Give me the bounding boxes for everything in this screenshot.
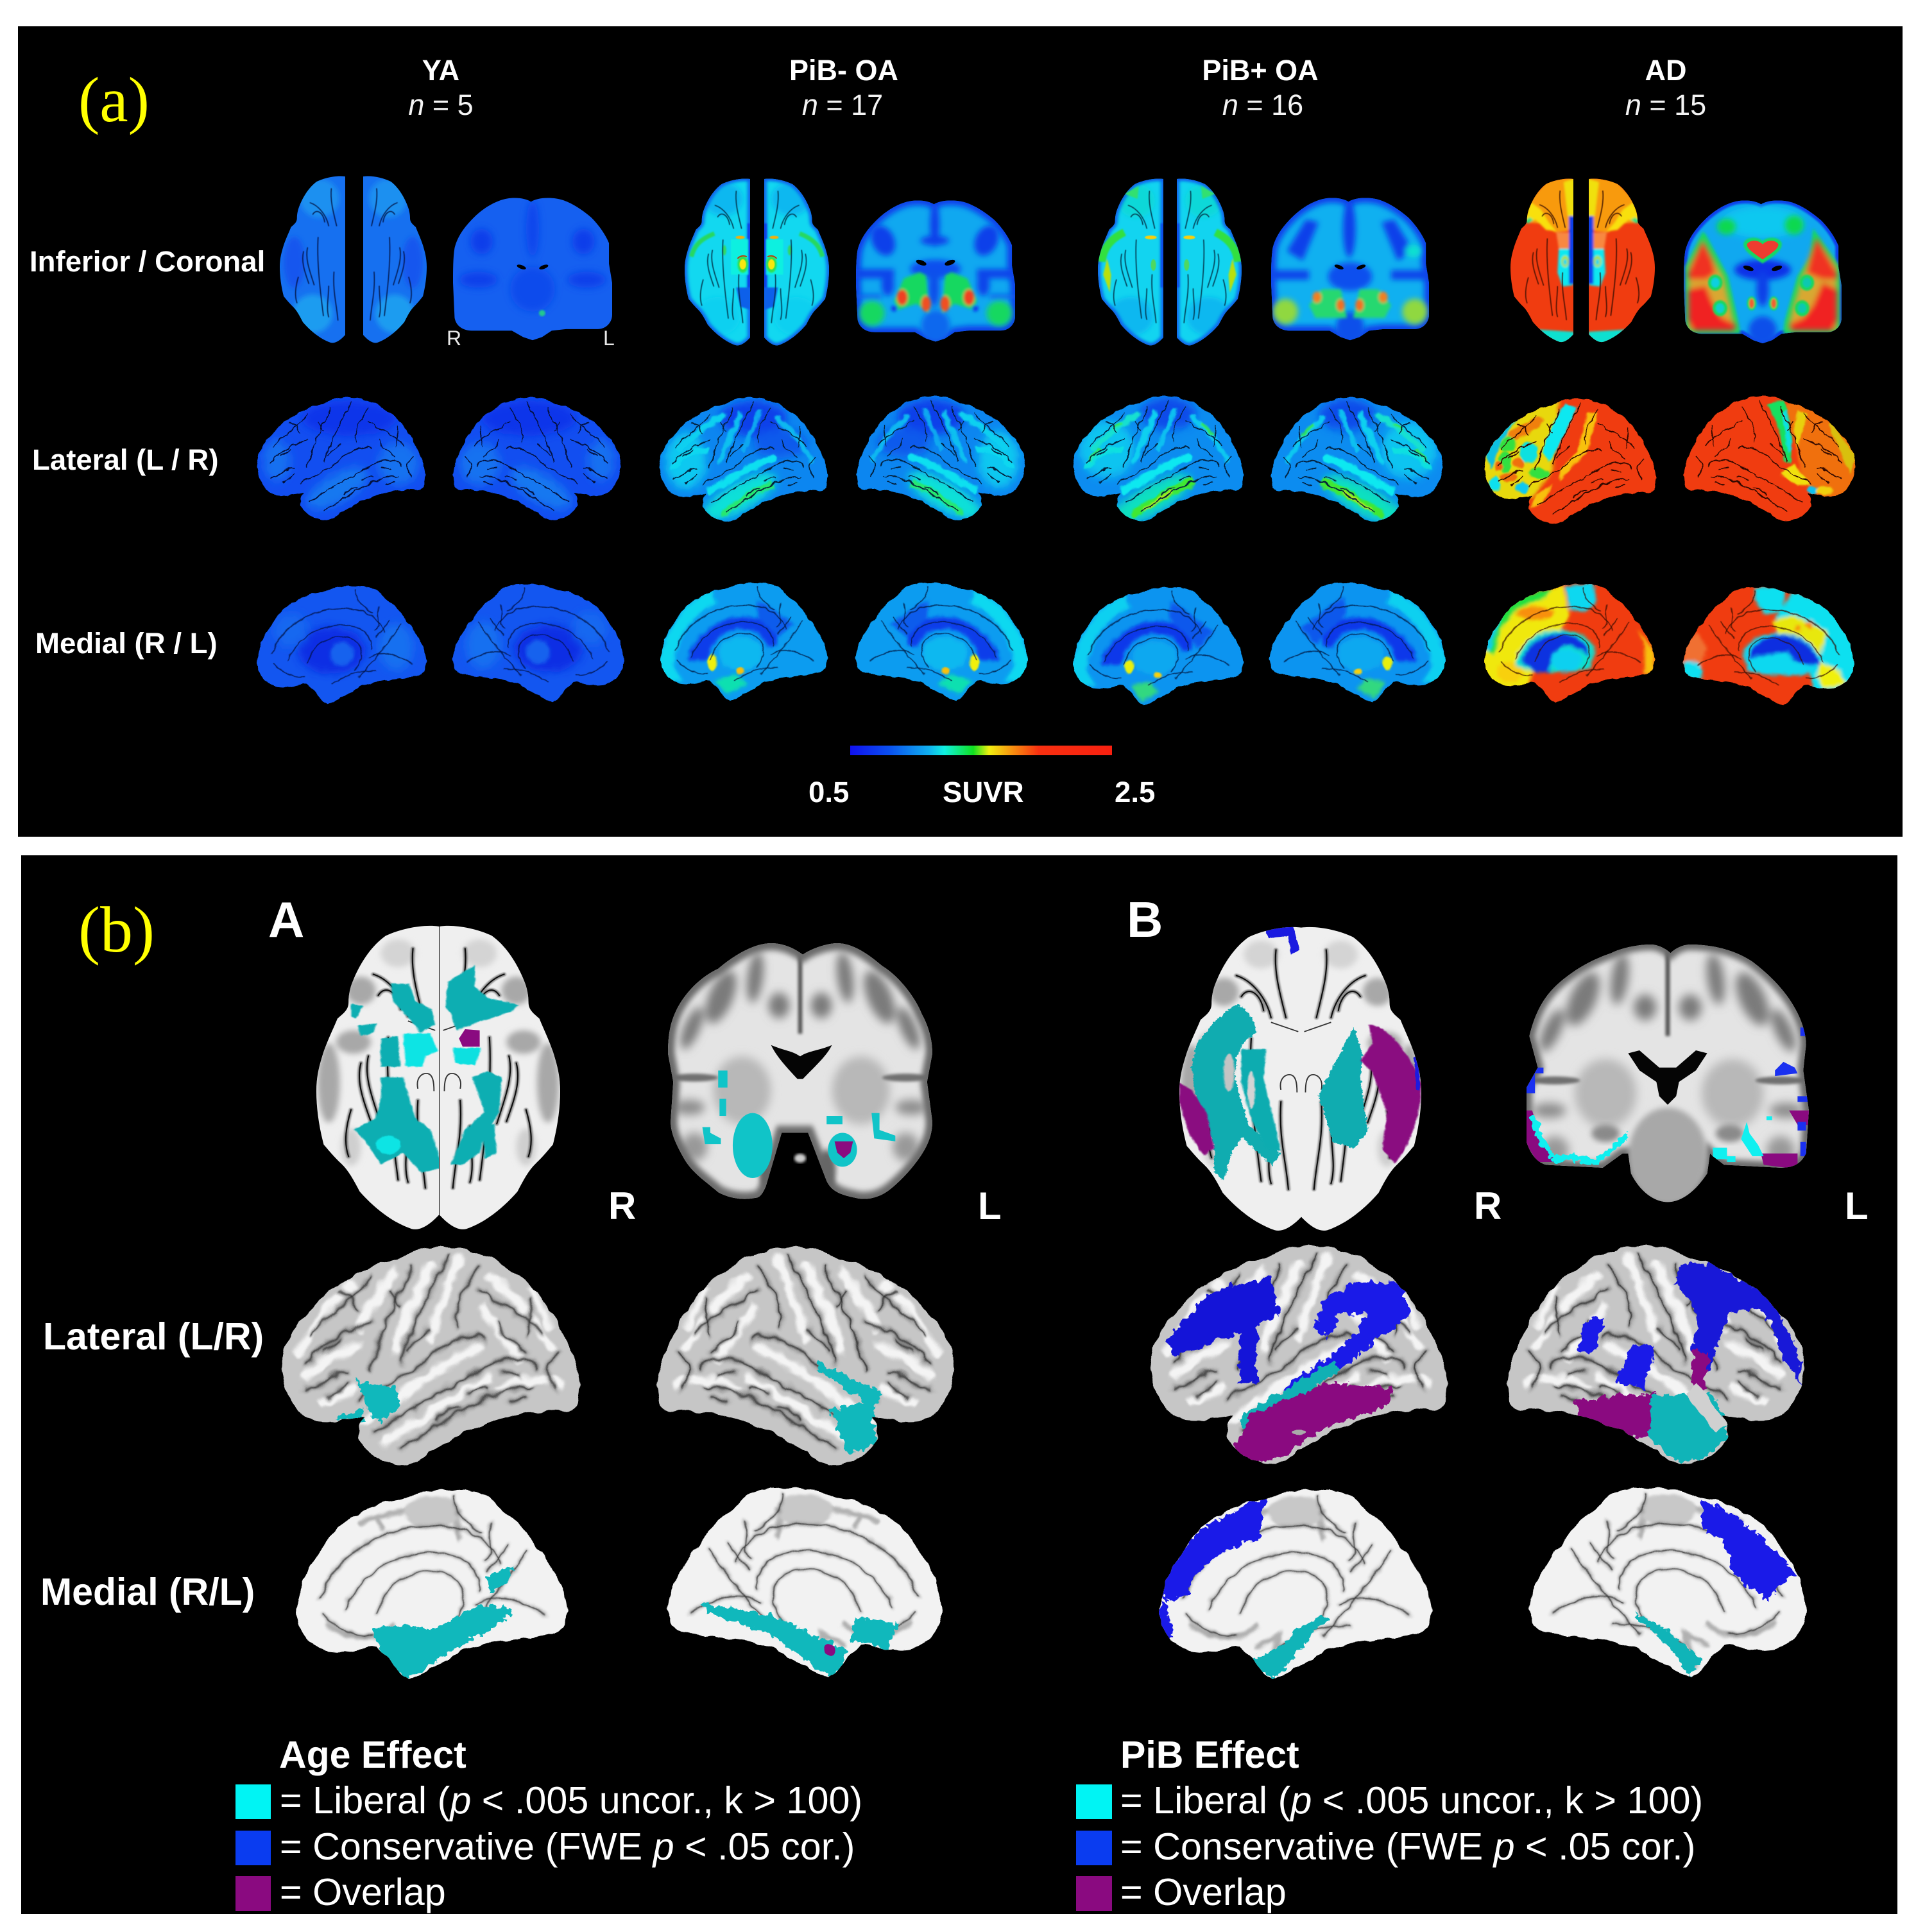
brain: AD lateral right [1681,392,1859,528]
row label: Medial: Medial (R/L) [40,1571,255,1613]
heading A: A [268,891,304,948]
legend: PiB Effect: PiB Effect [1120,1734,1299,1776]
legend: Age Effect: = Liberal (p < .005 uncor., k > 100) [280,1779,862,1822]
brain: B medial right [1159,1489,1433,1679]
brain: B lateral right [1507,1245,1804,1464]
brain: YA lateral right [450,394,624,527]
legend swatch: overlap [235,1876,271,1911]
legend swatch: overlap [1076,1876,1112,1911]
brain: YA medial right [253,583,430,711]
column heading: PiB+ OA: PiB+ OA [1202,54,1319,87]
column heading: YA: YA [422,54,459,87]
brain: PiB+ medial left [1265,580,1449,709]
brain: YA coronal [450,194,615,346]
orientation letters: L [603,327,615,350]
column heading: AD: n = 15 [1625,89,1706,121]
column heading: YA: n = 5 [408,89,474,121]
brain: PiB+ lateral left [1070,392,1247,534]
brain: PiB+ lateral right [1268,393,1446,534]
row label: Medial: Medial (R / L) [35,627,218,660]
column heading: PiB- OA [789,54,898,121]
brain: PiB- medial left [852,580,1031,708]
brain: B inferior surface [1177,924,1424,1240]
brain: PiB- lateral left [656,393,831,529]
column heading: AD [1625,54,1706,121]
colour bar scale labels [809,776,1155,808]
orientation letters: R [1474,1184,1502,1227]
panel label (a): (a) [78,64,150,135]
brain: A coronal MRI [663,937,937,1210]
orientation letters: L [978,1184,1002,1227]
brain: A inferior surface [314,923,563,1238]
brain: PiB- coronal [853,196,1018,348]
legend swatch: liberal [235,1784,271,1819]
brain: PiB- medial right [657,580,831,708]
legend swatch: conservative [235,1831,271,1865]
orientation letters [447,327,615,350]
column heading: PiB- OA: n = 17 [802,89,883,121]
brain: PiB- inferior [683,177,830,350]
brain: YA inferior [278,175,428,348]
brain: B coronal MRI [1521,939,1815,1213]
column heading: PiB+ OA [1202,54,1319,121]
brain: PiB- lateral right [853,392,1029,527]
brain: AD coronal [1681,196,1845,350]
brain: B medial left [1528,1487,1807,1677]
brain: A lateral right [656,1246,955,1466]
legend: PiB Effect: = Conservative (FWE p < .05 cor.) [1120,1825,1695,1868]
panel: (a) mean SUVR maps by group [18,26,1903,837]
brain: A medial right [296,1489,569,1679]
brain: YA medial left [449,581,628,709]
legend: Age Effect [235,1734,862,1913]
colour bar [850,746,1112,755]
row label: Inferior / Coronal: Inferior / Coronal [30,245,265,278]
brain: AD medial left [1680,585,1858,712]
colour bar scale labels: 2.5 [1115,776,1155,808]
brain: PiB+ medial right [1070,585,1247,712]
brain: AD lateral left [1481,395,1659,531]
legend: Age Effect: = Conservative (FWE p < .05 cor.) [280,1825,855,1868]
brain: PiB+ inferior [1097,177,1243,350]
brain: AD inferior [1509,177,1656,347]
column heading: AD: AD [1645,54,1686,87]
orientation letters: R [447,327,461,350]
orientation letters: L [1845,1184,1869,1227]
colour bar scale labels: 0.5 [809,776,849,808]
legend: Age Effect: Age Effect [279,1734,466,1776]
brain: A medial left [666,1487,943,1677]
legend: PiB Effect: = Liberal (p < .005 uncor., k > 100) [1120,1779,1703,1822]
brain: YA lateral left [253,394,429,527]
column heading: YA [408,54,474,121]
legend swatch: conservative [1076,1831,1112,1865]
column heading: PiB- OA: PiB- OA [789,54,898,87]
legend: PiB Effect: = Overlap [1120,1870,1287,1913]
brain: AD medial right [1481,581,1658,710]
heading B: B [1127,891,1163,948]
panel: (b) age and PiB effects [21,855,1897,1914]
column heading: PiB+ OA: n = 16 [1222,89,1303,121]
legend swatch: liberal [1076,1784,1112,1819]
orientation letters [608,1184,1869,1227]
row label: Lateral: Lateral (L / R) [32,443,219,476]
legend: PiB Effect [1076,1734,1703,1913]
brain: PiB+ coronal [1268,194,1432,346]
brain: B lateral left [1150,1245,1449,1464]
row label: Lateral: Lateral (L/R) [43,1315,264,1358]
colour bar scale labels: SUVR [943,776,1024,808]
panel label (b): (b) [78,894,155,966]
orientation letters: R [608,1184,636,1227]
legend: Age Effect: = Overlap [280,1870,446,1913]
brain: A lateral left [281,1246,581,1466]
